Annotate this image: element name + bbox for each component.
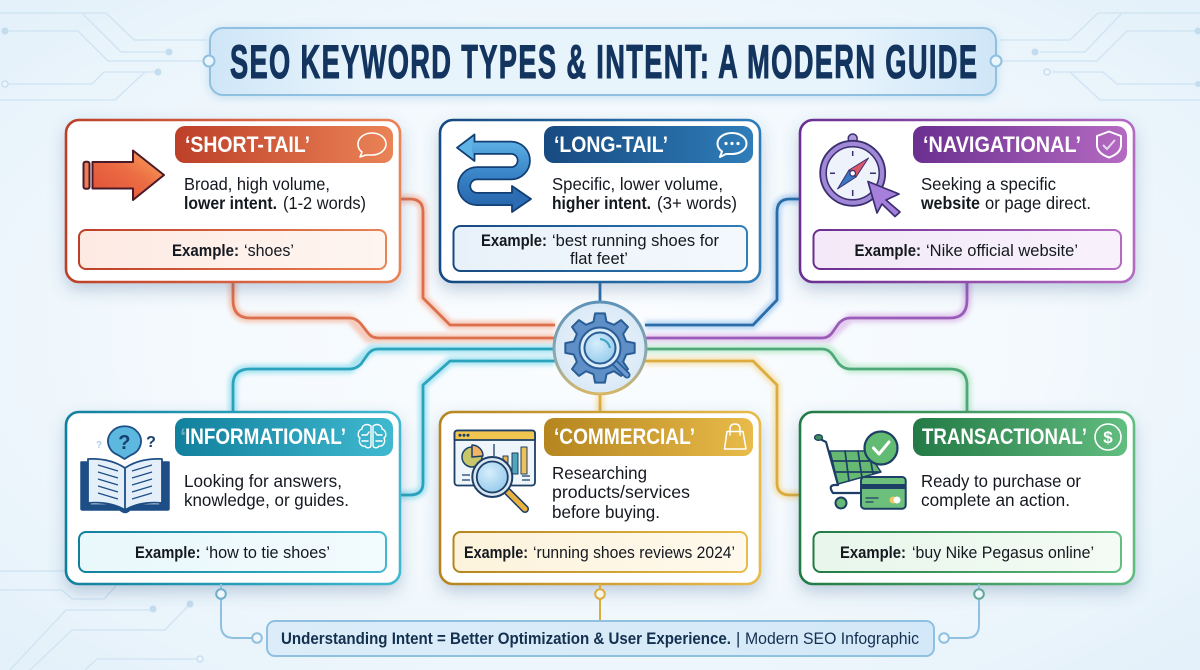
panel: commercial xyxy=(440,412,760,584)
heading pill: ‘SHORT-TAIL’ xyxy=(185,132,310,157)
central hub: gear and magnifier xyxy=(554,302,646,394)
icon: open book with question marks: ? xyxy=(96,440,102,451)
footer banner: Modern SEO Infographic xyxy=(745,630,919,648)
example box xyxy=(79,230,386,269)
example box xyxy=(814,230,1121,269)
example box xyxy=(454,226,747,271)
description: (1-2 words) xyxy=(283,193,366,213)
footer banner: | xyxy=(736,630,740,648)
heading pill: ‘NAVIGATIONAL’ xyxy=(923,132,1081,157)
footer banner: Understanding Intent = Better Optimization & User Experience. xyxy=(281,630,731,648)
description: or page direct. xyxy=(985,193,1091,213)
example box: ‘running shoes reviews 2024’ xyxy=(533,544,735,562)
description: knowledge, or guides. xyxy=(184,490,349,510)
example box: Example: xyxy=(481,232,547,250)
heading pill xyxy=(913,418,1127,456)
example box: ‘best running shoes for xyxy=(552,232,720,250)
example box: Example: xyxy=(172,242,239,260)
connector lines to central hub xyxy=(233,199,967,495)
description: Looking for answers, xyxy=(184,471,342,491)
icon: analytics window with magnifier xyxy=(454,430,535,509)
description: complete an action. xyxy=(921,490,1070,510)
description xyxy=(184,471,349,510)
description: Researching xyxy=(552,463,647,483)
heading pill xyxy=(175,126,393,163)
icon: open book with question marks: ? xyxy=(118,432,131,454)
example box xyxy=(814,532,1121,572)
example box: ‘shoes’ xyxy=(244,242,294,260)
heading pill xyxy=(913,126,1127,163)
description xyxy=(552,174,737,213)
description: lower intent. xyxy=(184,193,277,213)
description: Seeking a specific xyxy=(921,174,1056,194)
example box xyxy=(79,532,386,572)
description xyxy=(184,174,366,213)
example box: Example: xyxy=(464,544,528,562)
icon: open book with question marks: ? xyxy=(146,434,156,451)
heading pill: $ xyxy=(1103,428,1113,447)
description: Specific, lower volume, xyxy=(552,174,723,194)
description: higher intent. xyxy=(552,193,651,213)
example box: ‘buy Nike Pegasus online’ xyxy=(912,544,1094,562)
heading pill xyxy=(544,126,753,163)
heading pill: ‘LONG-TAIL’ xyxy=(554,132,668,157)
icon: shopping cart, check and credit card xyxy=(814,432,906,509)
panel: navigational xyxy=(800,120,1134,282)
description: website xyxy=(920,193,980,213)
example box xyxy=(454,532,747,572)
panel: long-tail xyxy=(440,120,760,282)
title text: SEO KEYWORD TYPES & INTENT: A MODERN GUIDE xyxy=(230,36,977,89)
heading pill: INFORMATIONAL’ xyxy=(185,424,346,449)
description xyxy=(552,463,690,522)
icon: open book with question marks xyxy=(81,426,169,512)
example box: ‘Nike official website’ xyxy=(926,242,1078,260)
example box: Example: xyxy=(854,242,921,260)
description: before buying. xyxy=(552,502,660,522)
example box: flat feet’ xyxy=(570,250,628,268)
icon: compass with cursor xyxy=(820,134,900,216)
example box: Example: xyxy=(840,544,906,562)
panel: transactional xyxy=(800,412,1134,584)
footer connectors xyxy=(216,584,984,643)
icon: right arrow xyxy=(84,150,164,200)
description: Broad, high volume, xyxy=(184,174,330,194)
icon: s-curve arrows xyxy=(457,134,531,212)
description: products/services xyxy=(552,482,690,502)
heading pill: ‘ xyxy=(180,424,186,449)
panel: short-tail xyxy=(66,120,400,282)
heading pill: TRANSACTIONAL’ xyxy=(922,424,1087,449)
example box: Example: xyxy=(135,544,200,562)
heading pill xyxy=(544,418,753,456)
title banner xyxy=(204,28,1002,95)
footer banner xyxy=(267,621,934,656)
heading pill xyxy=(175,418,393,456)
panel: informational xyxy=(66,412,400,584)
description: (3+ words) xyxy=(657,193,737,213)
heading pill: ‘COMMERCIAL’ xyxy=(554,424,695,449)
example box: ‘how to tie shoes’ xyxy=(206,544,330,562)
description xyxy=(921,471,1081,510)
description: Ready to purchase or xyxy=(921,471,1081,491)
description xyxy=(920,174,1091,213)
